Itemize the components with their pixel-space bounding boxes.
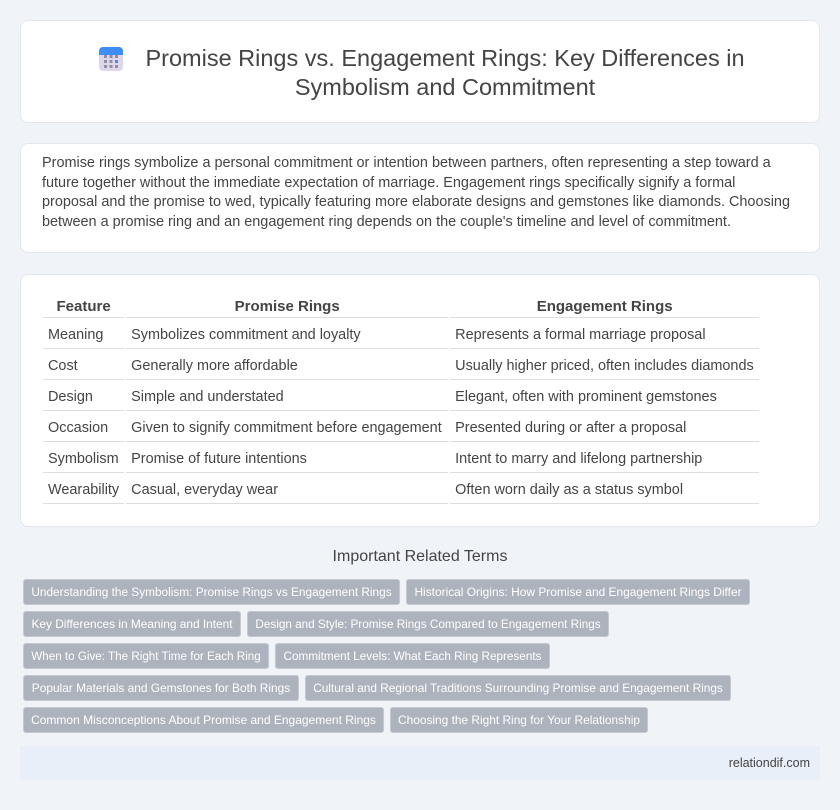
related term tags: Key Differences in Meaning and Intent: [31, 617, 233, 631]
footer: relationdif.com: [729, 756, 810, 770]
comparison table: Presented during or after a proposal: [455, 420, 686, 436]
title: Promise Rings vs. Engagement Rings: Key Differences in: [145, 45, 745, 71]
comparison table: Casual, everyday wear: [131, 482, 278, 498]
comparison table: Generally more affordable: [131, 358, 298, 374]
icon: calendar: [99, 47, 123, 71]
related term tags: Commitment Levels: What Each Ring Represents: [284, 650, 541, 663]
panel: intro: [20, 143, 820, 253]
comparison table: Elegant, often with prominent gemstones: [455, 388, 717, 404]
comparison table: Engagement Rings: [537, 298, 673, 314]
comparison table: Occasion: [48, 420, 108, 436]
comparison table: Design: [48, 388, 93, 404]
comparison table: Usually higher priced, often includes diamonds: [455, 358, 754, 374]
title: [145, 45, 745, 100]
comparison table: Represents a formal marriage proposal: [455, 326, 706, 342]
intro text: proposal and the promise to wed, typically featuring more elaborate designs and gemstones like diamonds. Choosing: [42, 194, 790, 210]
comparison table: Given to signify commitment before engagement: [131, 420, 442, 436]
comparison table: Simple and understated: [131, 388, 284, 404]
comparison table: Often worn daily as a status symbol: [455, 482, 683, 498]
intro text: [42, 155, 790, 230]
related term tags: Understanding the Symbolism: Promise Rings vs Engagement Rings: [31, 585, 392, 599]
comparison table: Intent to marry and lifelong partnership: [455, 450, 702, 466]
comparison table: Feature: [56, 298, 111, 314]
panel: comparison table: [20, 274, 820, 527]
related term tags: When to Give: The Right Time for Each Ring: [31, 650, 261, 663]
heading: related terms: Important Related Terms: [333, 548, 507, 565]
intro text: between a promise ring and an engagement ring depends on the couple's timeline and level of commitment.: [42, 214, 731, 230]
related term tags: Design and Style: Promise Rings Compared to Engagement Rings: [255, 618, 601, 631]
related term tags: Historical Origins: How Promise and Engagement Rings Differ: [414, 585, 742, 599]
comparison table: Symbolizes commitment and loyalty: [131, 326, 361, 342]
comparison table: Promise of future intentions: [131, 450, 307, 466]
footer: [20, 746, 820, 780]
comparison table: Cost: [48, 358, 78, 374]
comparison table: Wearability: [48, 482, 119, 498]
related term tags: Common Misconceptions About Promise and Engagement Rings: [31, 713, 376, 727]
panel: header: [20, 20, 820, 123]
comparison table: [43, 298, 759, 504]
comparison table: Promise Rings: [235, 298, 340, 314]
intro text: Promise rings symbolize a personal commitment or intention between partners, often representing a step toward a: [42, 155, 771, 171]
related term tags: Cultural and Regional Traditions Surrounding Promise and Engagement Rings: [313, 681, 723, 695]
intro text: future together without the immediate expectation of marriage. Engagement rings specifically signify a formal: [42, 175, 735, 191]
comparison table: Meaning: [48, 326, 103, 342]
related term tags: Choosing the Right Ring for Your Relationship: [398, 713, 640, 727]
comparison table: Symbolism: [48, 450, 119, 466]
title: Symbolism and Commitment: [295, 74, 595, 100]
related term tags: Popular Materials and Gemstones for Both Rings: [32, 681, 290, 695]
